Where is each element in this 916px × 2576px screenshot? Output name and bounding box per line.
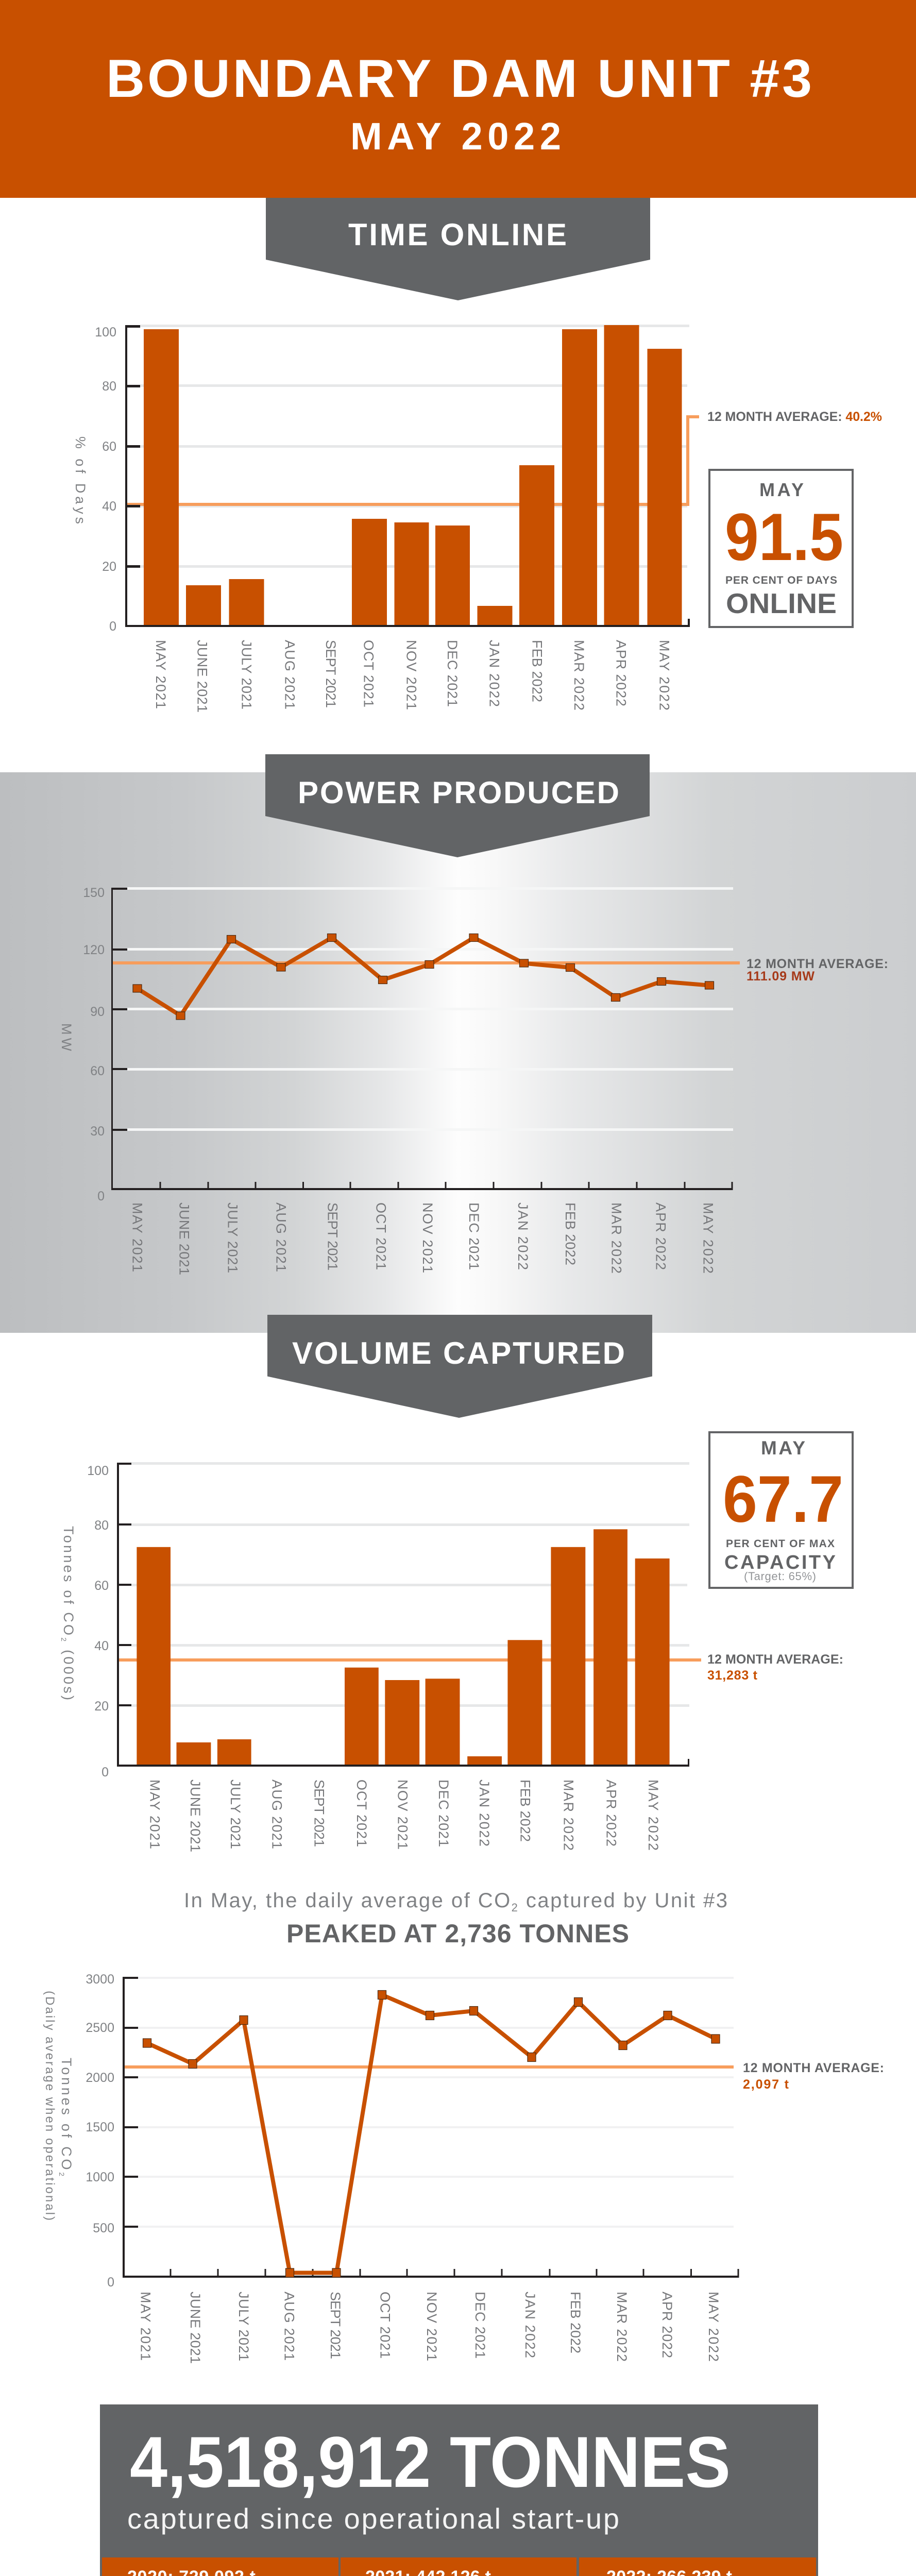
x axis labels: SEPT 2021	[323, 640, 338, 708]
heading: daily average peak	[184, 1889, 727, 1948]
x axis labels: OCT 2021	[361, 640, 377, 707]
axes	[123, 1977, 739, 2278]
x axis labels: JAN 2022	[515, 1202, 531, 1270]
panel: total tonnes captured	[100, 2404, 818, 2576]
section heading: time online	[266, 198, 650, 300]
y axis labels: 0	[97, 1189, 105, 1204]
y axis labels	[86, 1972, 114, 2290]
y axis labels: 1500	[86, 2120, 114, 2134]
x axis labels: JUNE 2021	[188, 1780, 203, 1852]
x axis labels	[147, 1780, 661, 1852]
x axis labels: JULY 2021	[225, 1202, 240, 1273]
y axis labels	[95, 325, 116, 634]
bars	[144, 325, 682, 626]
stat box: 91.5 per cent online: ONLINE	[726, 587, 837, 619]
axes	[125, 325, 690, 627]
heading: daily average peak: PEAKED AT 2,736 TONNES	[286, 1919, 629, 1948]
bars	[137, 1529, 670, 1766]
y axis labels	[83, 886, 105, 1204]
heading: daily average peak: In May, the daily average of CO	[184, 1889, 510, 1912]
stat box: 91.5 per cent online: PER CENT OF DAYS	[725, 574, 837, 586]
y axis labels: 40	[94, 1639, 109, 1653]
y axis labels: 500	[93, 2221, 114, 2235]
section heading: time online: TIME ONLINE	[348, 217, 567, 252]
data markers	[133, 934, 714, 1020]
x axis labels: JULY 2021	[228, 1780, 243, 1849]
x axis labels: AUG 2021	[282, 640, 298, 709]
y axis labels: 30	[90, 1124, 105, 1139]
average label: power produced: 111.09 MW	[747, 969, 815, 984]
x axis labels	[130, 1202, 716, 1275]
line chart: daily average of CO2 captured	[43, 1972, 739, 2364]
line chart: power produced	[59, 886, 740, 1275]
y axis title: MW	[59, 1023, 74, 1052]
y axis labels: 0	[107, 2275, 114, 2290]
section heading: volume captured: VOLUME CAPTURED	[292, 1336, 625, 1370]
y axis labels: 100	[87, 1464, 109, 1478]
x axis labels: APR 2022	[603, 1780, 619, 1846]
average label: volume captured: 31,283 t	[707, 1668, 758, 1683]
x axis labels	[138, 2292, 721, 2364]
x axis labels: JULY 2021	[239, 640, 255, 709]
x axis labels: NOV 2021	[404, 640, 419, 710]
y axis title: 2	[58, 2172, 66, 2176]
section heading: power produced: POWER PRODUCED	[298, 775, 619, 810]
12 month average line	[126, 415, 699, 506]
x axis labels: MAY 2021	[153, 640, 168, 709]
stat box: 91.5 per cent online: 91.5	[725, 499, 843, 574]
y axis labels: 150	[83, 886, 105, 900]
x axis labels: JUNE 2021	[176, 1202, 192, 1275]
y axis labels	[87, 1464, 109, 1780]
average label: daily average: 2,097 t	[743, 2077, 789, 2092]
x axis labels: SEPT 2021	[328, 2292, 343, 2359]
x axis labels: MAY 2022	[656, 640, 672, 710]
x axis labels: JAN 2022	[486, 640, 502, 707]
x axis labels: DEC 2021	[472, 2292, 488, 2359]
x axis labels: MAR 2022	[609, 1202, 624, 1274]
x axis labels: NOV 2021	[424, 2292, 439, 2361]
data line	[137, 938, 709, 1015]
y axis title: Tonnes of CO	[59, 2058, 74, 2170]
y axis labels: 1000	[86, 2170, 114, 2184]
x axis labels: MAY 2021	[138, 2292, 154, 2361]
y axis labels: 90	[90, 1005, 105, 1019]
y axis title: Tonnes of CO	[61, 1526, 76, 1635]
x axis labels: FEB 2022	[563, 1202, 578, 1265]
y axis title	[43, 1991, 74, 2221]
x axis labels: JULY 2021	[236, 2292, 251, 2361]
y axis title: % of Days	[73, 436, 88, 524]
average label: power produced	[747, 957, 888, 984]
x axis labels: AUG 2021	[274, 1202, 289, 1272]
x axis labels: SEPT 2021	[311, 1780, 327, 1847]
12 month average line	[118, 1658, 701, 1662]
x axis labels: NOV 2021	[395, 1780, 410, 1850]
y axis labels: 40	[102, 499, 116, 514]
stat box: 67.7 per cent of capacity: 67.7	[723, 1463, 843, 1536]
x axis labels: OCT 2021	[354, 1780, 369, 1847]
x axis labels: DEC 2021	[445, 640, 460, 707]
y axis labels: 100	[95, 325, 116, 340]
y axis labels: 2500	[86, 2021, 114, 2035]
y axis labels: 60	[94, 1579, 109, 1593]
x axis labels: FEB 2022	[568, 2292, 583, 2353]
x axis labels: MAR 2022	[561, 1780, 576, 1851]
12 month average line	[112, 961, 740, 964]
total caption: captured since operational start-up	[127, 2502, 619, 2535]
x axis labels: MAY 2021	[147, 1780, 163, 1849]
stat box: 67.7 per cent of capacity: (Target: 65%)	[744, 1570, 816, 1583]
y axis title: (000s)	[61, 1643, 76, 1700]
x axis labels: OCT 2021	[377, 2292, 393, 2359]
y axis labels: 0	[101, 1765, 109, 1780]
y axis title: 2	[60, 1637, 68, 1641]
data line	[147, 1995, 716, 2273]
section heading: power produced	[265, 754, 650, 857]
section heading: volume captured	[267, 1315, 652, 1418]
panel: power produced background	[0, 772, 916, 1333]
average label: daily average: 12 MONTH AVERAGE:	[743, 2061, 884, 2075]
stat box: 67.7 per cent of capacity: CAPACITY	[724, 1552, 836, 1573]
y axis labels: 80	[94, 1518, 109, 1533]
x axis labels: JAN 2022	[477, 1780, 492, 1846]
x axis labels: AUG 2021	[269, 1780, 285, 1849]
y axis labels: 60	[90, 1064, 105, 1078]
x axis labels: MAR 2022	[614, 2292, 630, 2362]
big total: 4,518,912 TONNES	[130, 2421, 731, 2502]
x axis labels: JUNE 2021	[188, 2292, 203, 2364]
stat box: 91.5 per cent online	[709, 470, 853, 627]
yearly total: 2021	[341, 2557, 576, 2576]
x axis labels: DEC 2021	[436, 1780, 451, 1847]
y axis labels: 3000	[86, 1972, 114, 1987]
x axis labels: JUNE 2021	[195, 640, 210, 713]
axes	[117, 1463, 689, 1767]
y axis title: (Daily average when operational)	[43, 1991, 57, 2221]
y axis labels: 80	[102, 379, 116, 394]
heading: daily average peak: 2	[512, 1901, 518, 1914]
stat box: 67.7 per cent of capacity: MAY	[761, 1437, 805, 1459]
y axis labels: 120	[83, 943, 105, 957]
average label: volume captured: 12 MONTH AVERAGE:	[707, 1652, 843, 1667]
axes	[111, 888, 733, 1190]
average label: power produced: 12 MONTH AVERAGE:	[747, 957, 888, 971]
x axis labels: MAY 2022	[706, 2292, 721, 2362]
x axis labels: OCT 2021	[373, 1202, 388, 1270]
x axis labels: NOV 2021	[420, 1202, 435, 1273]
12 month average line	[124, 2065, 734, 2069]
x axis labels: MAY 2022	[646, 1780, 661, 1851]
x axis labels: FEB 2022	[529, 640, 545, 702]
stat box: 67.7 per cent of capacity	[709, 1432, 853, 1588]
y axis labels: 0	[109, 619, 116, 634]
header banner	[0, 0, 916, 198]
x axis labels: SEPT 2021	[325, 1202, 340, 1270]
x axis labels: FEB 2022	[518, 1780, 533, 1842]
x axis labels: APR 2022	[614, 640, 629, 706]
bar chart: volume captured	[60, 1462, 701, 1852]
average label: time online: 12 MONTH AVERAGE: 40.2%	[707, 410, 882, 424]
x axis labels: APR 2022	[653, 1202, 669, 1270]
y axis labels: 20	[102, 560, 116, 574]
x axis labels: AUG 2021	[281, 2292, 297, 2361]
y axis labels: 2000	[86, 2071, 114, 2085]
title: BOUNDARY DAM UNIT #3	[106, 49, 812, 109]
x axis labels: MAY 2021	[130, 1202, 145, 1272]
x axis labels: MAY 2022	[701, 1202, 716, 1274]
subtitle date: MAY 2022	[350, 115, 561, 158]
heading: daily average peak: captured by Unit #3	[519, 1889, 727, 1912]
stat box: 91.5 per cent online: MAY	[759, 479, 804, 500]
yearly total: 2020	[102, 2557, 338, 2576]
data markers	[143, 1991, 720, 2277]
yearly total: 2022	[579, 2557, 816, 2576]
x axis labels: DEC 2021	[466, 1202, 482, 1270]
x axis labels	[153, 640, 672, 713]
x axis labels: APR 2022	[659, 2292, 675, 2358]
x axis labels: MAR 2022	[571, 640, 587, 710]
y axis labels: 60	[102, 439, 116, 454]
stat box: 67.7 per cent of capacity: PER CENT OF MAX	[726, 1538, 835, 1550]
average label: daily average	[743, 2061, 884, 2092]
x axis labels: JAN 2022	[522, 2292, 538, 2358]
y axis labels: 20	[94, 1699, 109, 1714]
average label: volume captured	[707, 1652, 843, 1683]
bar chart: time online	[73, 325, 699, 713]
